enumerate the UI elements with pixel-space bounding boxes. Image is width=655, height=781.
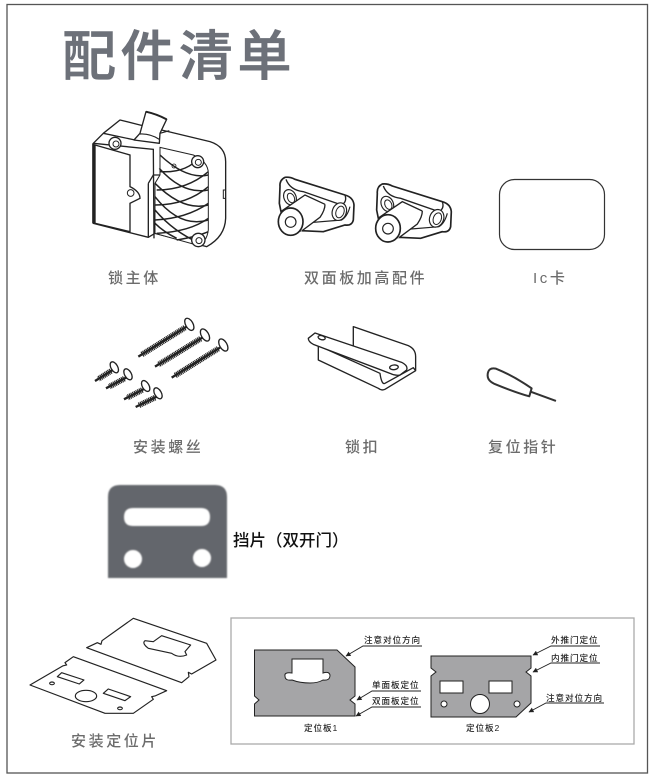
title: 配件清单 bbox=[62, 12, 296, 91]
label: screws: 安装螺丝 bbox=[133, 439, 203, 456]
label: reset pin: 复位指针 bbox=[488, 438, 558, 456]
icon: blocking plate bbox=[108, 485, 227, 578]
icon: lock body bbox=[93, 112, 226, 247]
callout text: 双面板定位 bbox=[372, 695, 419, 706]
label: positioning sheets: 安装定位片 bbox=[71, 732, 159, 750]
callout text: 注意对位方向 bbox=[546, 692, 603, 703]
callout text: 单面板定位 bbox=[372, 679, 419, 690]
icon: screws bbox=[95, 317, 230, 407]
plate 1 bbox=[254, 650, 355, 716]
callout text: 定位板1 bbox=[304, 722, 338, 733]
icon: double panel height brackets bbox=[278, 177, 451, 242]
label: lock catch: 锁扣 bbox=[345, 439, 380, 456]
icon: lock catch bbox=[308, 327, 416, 390]
callout text: 外推门定位 bbox=[551, 634, 598, 645]
callout text: 定位板2 bbox=[466, 722, 500, 733]
label: blocking plate: 挡片（双开门） bbox=[233, 531, 348, 550]
icon: positioning sheets bbox=[30, 618, 216, 713]
label: IC card: Ic卡 bbox=[533, 270, 567, 287]
callout leaders bbox=[346, 646, 604, 716]
callout text bbox=[304, 634, 603, 733]
panel: positioning plate diagram bbox=[231, 618, 634, 744]
label: lock body: 锁主体 bbox=[108, 270, 161, 287]
icon: reset pin bbox=[488, 368, 556, 401]
icon: IC card bbox=[500, 180, 604, 250]
plate 2 bbox=[431, 656, 531, 717]
callout text: 内推门定位 bbox=[551, 652, 598, 663]
label: double panel brackets: 双面板加高配件 bbox=[304, 270, 427, 287]
callout text: 注意对位方向 bbox=[364, 634, 421, 645]
